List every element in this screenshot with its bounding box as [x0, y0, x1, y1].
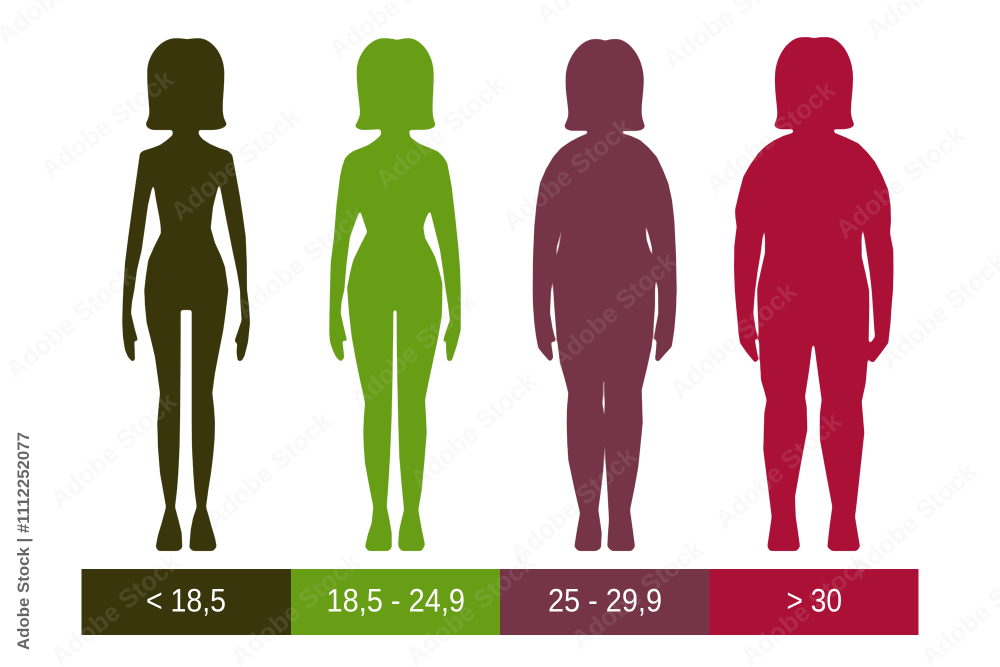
BMI scale bar: [82, 569, 918, 635]
watermark pattern: Adobe Stock: [664, 275, 803, 404]
silhouette: underweight figure: [122, 38, 250, 551]
silhouette: obese figure: [734, 37, 894, 551]
watermark pattern: Adobe Stock: [165, 101, 306, 227]
segment: 25 to 29,9: [500, 569, 710, 635]
watermark pattern: Adobe Stock: [35, 63, 179, 185]
segment: over 30: > 30: [786, 582, 842, 618]
watermark pattern: Adobe Stock: [565, 533, 709, 655]
watermark pattern: Adobe Stock: [544, 245, 683, 374]
silhouette: overweight figure: [533, 39, 677, 551]
watermark pattern: Adobe Stock: [504, 440, 643, 569]
segment: 18,5 to 24,9: 18,5 - 24,9: [326, 582, 465, 618]
watermark pattern: Adobe Stock: [0, 259, 141, 385]
watermark pattern: Adobe Stock: [844, 455, 983, 584]
watermark pattern: Adobe Stock: [700, 74, 841, 200]
segment: under 18,5: < 18,5: [146, 582, 226, 618]
watermark pattern: Adobe Stock: [830, 119, 971, 245]
watermark pattern: Adobe Stock: [404, 365, 543, 494]
watermark pattern: Adobe Stock: [230, 199, 371, 325]
segment: 25 to 29,9: 25 - 29,9: [548, 582, 662, 618]
segment: under 18,5: [82, 569, 291, 635]
watermark pattern: Adobe Stock: [709, 405, 848, 534]
watermark pattern: Adobe Stock: [44, 385, 183, 514]
segment: over 30: [710, 569, 918, 635]
silhouette: normal weight figure: [329, 38, 461, 551]
side credit text: Adobe Stock | #1112252077: [14, 432, 33, 650]
watermark pattern: Adobe Stock: [344, 285, 483, 414]
watermark pattern: Adobe Stock: [370, 69, 511, 195]
segment: 18,5 to 24,9: [291, 569, 500, 635]
watermark pattern: Adobe Stock: [199, 405, 338, 534]
watermark pattern: Adobe Stock: [497, 111, 638, 237]
